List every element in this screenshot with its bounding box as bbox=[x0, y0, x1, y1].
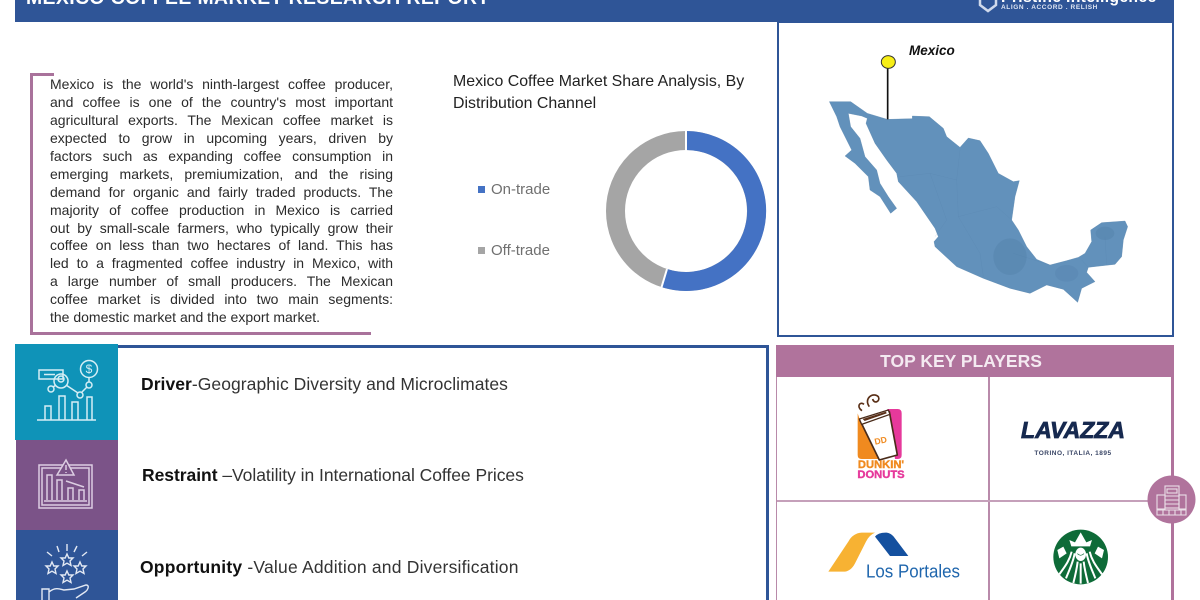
heading bbox=[776, 345, 1174, 377]
Lavazza wordmark: LAVAZZA bbox=[1021, 417, 1125, 443]
text: out by small-scale farmers, who typically grow their bbox=[50, 220, 393, 236]
text: factors such as expanding coffee consumption in bbox=[50, 148, 393, 164]
bracket decoration bbox=[30, 73, 371, 335]
chart title: Distribution Channel bbox=[453, 95, 596, 112]
Dunkin wordmark: DUNKIN' bbox=[858, 459, 904, 471]
header banner bbox=[15, 0, 1174, 22]
text: majority of coffee production in Mexico is carried bbox=[50, 202, 393, 218]
legend: on-trade: On-trade bbox=[491, 181, 550, 198]
icon tile: opportunity bbox=[16, 530, 118, 600]
text: expected to grow in upcoming years, driven by bbox=[50, 130, 393, 146]
text: agricultural exports. The Mexican coffee market is bbox=[50, 112, 393, 128]
restraint text: Restraint –Volatility in International Coffee Prices bbox=[142, 465, 524, 485]
Dunkin wordmark bbox=[857, 459, 905, 480]
brand tagline: ALIGN . ACCORD . RELISH bbox=[1001, 4, 1098, 11]
heading: TOP KEY PLAYERS bbox=[880, 351, 1042, 371]
map of Mexico bbox=[829, 55, 1128, 303]
text: coffee on less than two hectares of land. This has bbox=[50, 237, 393, 253]
text: the domestic market and the export market. bbox=[50, 309, 320, 325]
chart legend bbox=[478, 181, 550, 259]
Dunkin wordmark: DONUTS bbox=[857, 468, 905, 480]
description text block bbox=[30, 73, 371, 335]
Lavazza tagline: TORINO, ITALIA, 1895 bbox=[1034, 450, 1112, 457]
icon tile: restraint bbox=[16, 440, 118, 530]
donut chart bbox=[606, 131, 766, 291]
logo: Los Portales: Los Portales bbox=[866, 561, 960, 582]
panel: map bbox=[777, 20, 1174, 337]
icon: company badge bbox=[1148, 476, 1196, 524]
text: and coffee is one of the country's most important bbox=[50, 94, 393, 110]
map label: Mexico bbox=[909, 43, 955, 58]
legend: off-trade: Off-trade bbox=[491, 242, 550, 259]
text: Mexico is the world's ninth-largest coffee producer, bbox=[50, 76, 393, 92]
driver text: Driver-Geographic Diversity and Microclimates bbox=[141, 374, 508, 394]
dollar sign: $ bbox=[86, 362, 92, 376]
text: coffee market is divided into two main segments: bbox=[50, 291, 393, 307]
chart title: Mexico Coffee Market Share Analysis, By bbox=[453, 73, 744, 90]
logo: Dunkin Donuts: DD bbox=[874, 434, 888, 447]
brand logo bbox=[978, 0, 1157, 12]
panel: top key players bbox=[776, 345, 1174, 600]
panel: market dynamics bbox=[117, 345, 769, 600]
logo: Los Portales bbox=[828, 532, 960, 582]
text: demand for organic and fairly traded products. The bbox=[50, 184, 393, 200]
logo: Lavazza bbox=[1020, 417, 1125, 457]
icon tile: driver bbox=[15, 344, 118, 440]
opportunity text: Opportunity -Value Addition and Diversification bbox=[140, 557, 519, 577]
brand icon bbox=[978, 0, 998, 12]
text: a large number of small producers. The Mexican bbox=[50, 273, 393, 289]
text: led to a fragmented coffee industry in Mexico, with bbox=[50, 255, 393, 271]
logo: Dunkin Donuts bbox=[857, 394, 905, 480]
logo: Starbucks bbox=[1053, 530, 1108, 584]
chart title bbox=[453, 73, 744, 112]
text: emerging markets, premiumization, and the rising bbox=[50, 166, 393, 182]
